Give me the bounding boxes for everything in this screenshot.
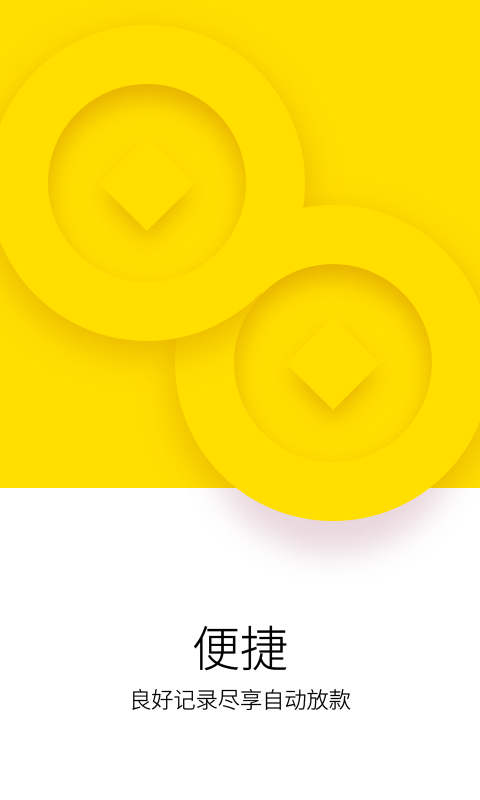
lower coin: diamond [286, 317, 380, 410]
upper coin: diamond [99, 136, 195, 231]
lower coin: square hole disc and inner shadow [234, 264, 432, 448]
illustration: interlocked coins [0, 0, 480, 565]
lower coin: ring section overlapping upper coin [260, 206, 431, 348]
title: 便捷 [192, 624, 288, 677]
lower coin: diamond shadow [292, 333, 374, 419]
shadow on white below lower coin [205, 297, 461, 553]
upper coin: diamond shadow [106, 153, 188, 239]
upper coin: outer shadow [0, 37, 305, 353]
upper coin [0, 25, 305, 341]
subtitle: 良好记录尽享自动放款 [129, 688, 351, 713]
lower coin: outer shadow [175, 217, 480, 533]
lower coin [175, 205, 480, 521]
yellow background panel [0, 0, 480, 488]
